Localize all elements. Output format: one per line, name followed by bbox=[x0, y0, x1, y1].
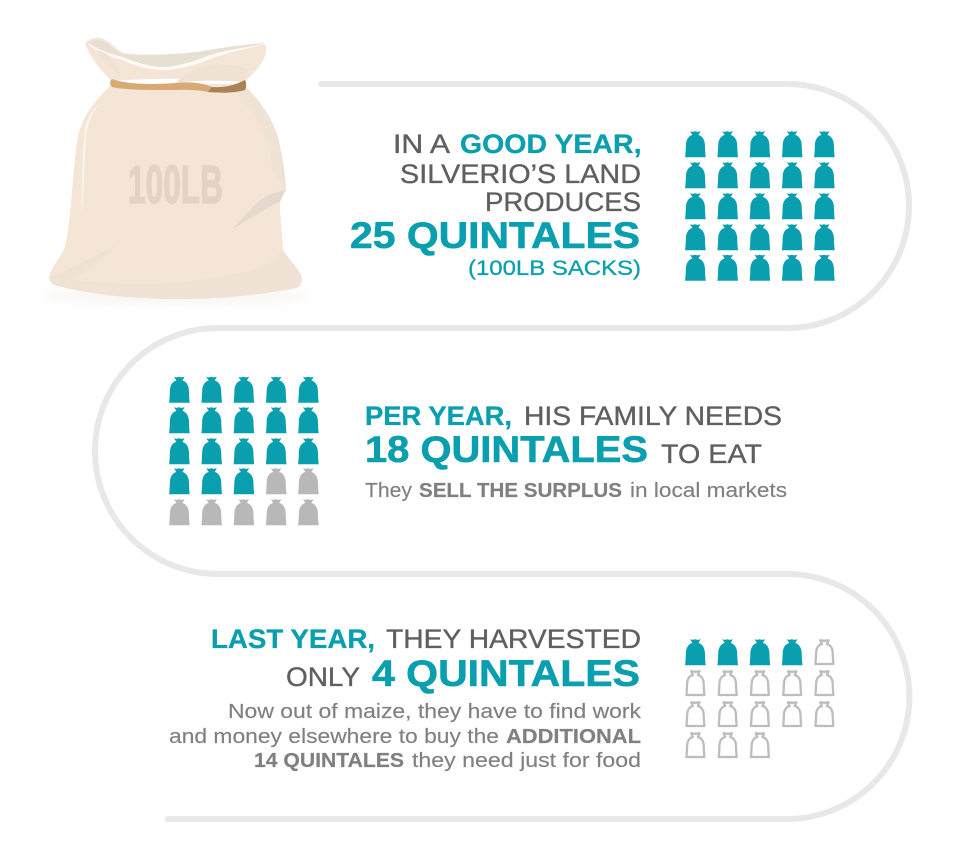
14 outlined sacks missing bbox=[686, 640, 833, 757]
text block: last year: they need just for food bbox=[412, 750, 641, 772]
text block: last year: Now out of maize, they have to find work bbox=[228, 701, 642, 723]
text block: last year: 14 QUINTALES bbox=[254, 750, 404, 772]
text block: good year bbox=[350, 129, 642, 280]
pictogram: 18 of 25 sacks needed bbox=[169, 377, 319, 525]
text block: last year: ONLY bbox=[286, 662, 360, 692]
text block: family needs: SELL THE SURPLUS bbox=[419, 480, 622, 502]
4 teal sacks harvested bbox=[685, 639, 802, 665]
illustration: 100lb sack bbox=[42, 38, 312, 302]
text block: good year: SILVERIO’S LAND bbox=[400, 159, 641, 189]
18 teal sacks eaten bbox=[169, 377, 319, 494]
text block: good year: (100LB SACKS) bbox=[468, 257, 641, 280]
7 grey surplus sacks bbox=[169, 468, 319, 525]
text block: last year: 4 QUINTALES bbox=[372, 653, 640, 694]
pictogram: 4 harvested of 18 needed bbox=[685, 639, 833, 757]
sack rope tie bbox=[110, 79, 246, 93]
text block: good year: IN A bbox=[393, 129, 450, 159]
sack fold bbox=[233, 190, 285, 229]
text block: last year: THEY HARVESTED bbox=[386, 624, 641, 654]
text block: good year: PRODUCES bbox=[485, 187, 641, 217]
text block: last year: and money elsewhere to buy the bbox=[169, 726, 499, 748]
sack rope shadow bbox=[208, 80, 246, 93]
text block: family needs: PER YEAR, bbox=[365, 401, 512, 431]
text block: family needs: 18 QUINTALES bbox=[365, 429, 648, 470]
text block: family needs bbox=[365, 401, 787, 502]
text block: good year: GOOD YEAR, bbox=[460, 129, 642, 159]
serpentine connector line bbox=[95, 84, 909, 819]
sack label: 100LB bbox=[128, 155, 223, 215]
text block: family needs: They bbox=[365, 480, 412, 502]
text block: last year: ADDITIONAL bbox=[506, 726, 641, 748]
text block: family needs: HIS FAMILY NEEDS bbox=[524, 401, 782, 431]
text block: last year: LAST YEAR, bbox=[211, 624, 375, 654]
pictogram: 25 sacks produced bbox=[685, 131, 835, 281]
text block: good year: 25 QUINTALES bbox=[350, 215, 640, 256]
text block: last year bbox=[169, 624, 642, 772]
text block: family needs: TO EAT bbox=[661, 439, 762, 469]
text block: family needs: in local markets bbox=[630, 480, 787, 502]
sack top flare bbox=[86, 38, 266, 81]
